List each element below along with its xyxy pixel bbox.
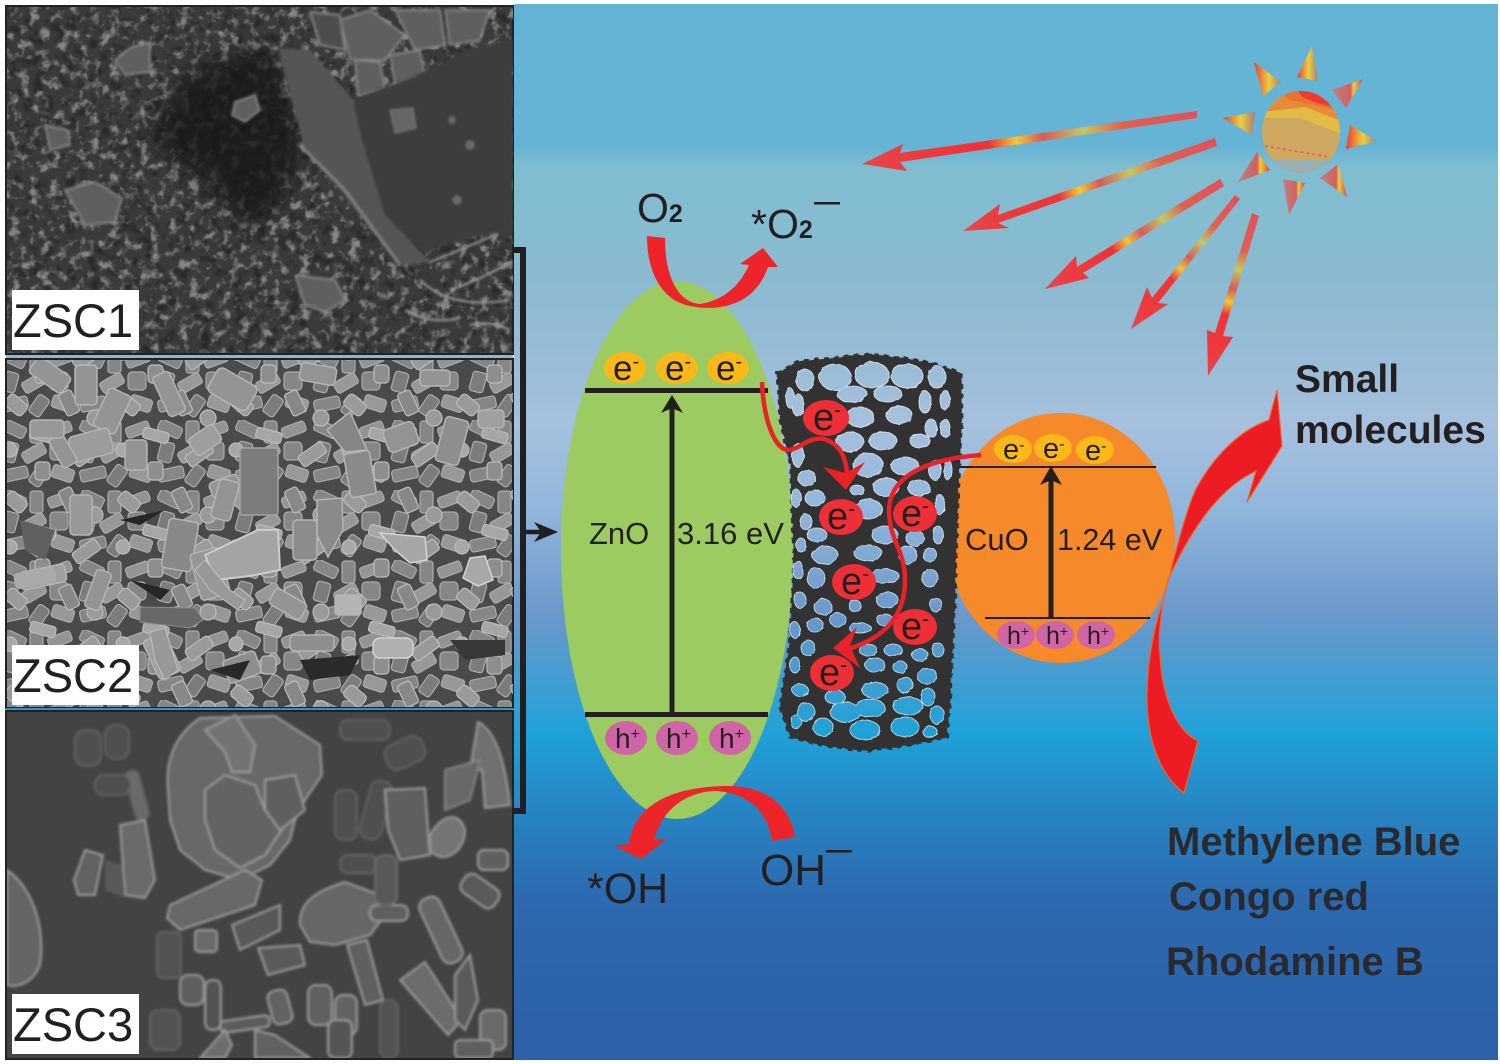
label: hydroxyl radical: *OH — [587, 865, 668, 913]
label: superoxide radical: *O2 — [751, 201, 813, 247]
ray 2 — [963, 138, 1217, 231]
CuO electrons: e — [1003, 434, 1019, 466]
sun body — [1260, 90, 1344, 174]
CuO electrons: e — [1085, 435, 1101, 467]
nanotube electrons: - — [848, 498, 855, 521]
ZnO valence band line — [585, 712, 768, 717]
ray 1 — [862, 111, 1197, 171]
nanotube electrons: - — [840, 654, 847, 677]
CuO electrons — [994, 433, 1114, 467]
ZnO electrons: e — [665, 349, 684, 388]
ZnO holes: + — [735, 726, 744, 743]
nanotube electrons: - — [834, 399, 841, 422]
ray 5 — [1207, 213, 1259, 376]
ZnO band gap arrow — [661, 395, 683, 713]
ZnO holes: h — [666, 723, 682, 754]
CuO band gap value: 1.24 eV — [1057, 523, 1163, 557]
label: superoxide radical — [751, 201, 840, 247]
nanotube electrons: - — [922, 495, 929, 518]
electron transfer arrow from ZnO to nanotube — [762, 382, 865, 490]
panel: SEM image ZSC3 — [6, 711, 513, 1059]
ZnO conduction band line — [585, 388, 768, 393]
nanotube electrons: e — [901, 606, 922, 648]
nanotube electrons: e — [813, 397, 834, 439]
ZnO electrons: e — [613, 349, 632, 388]
ZnO electrons — [604, 349, 749, 388]
label: small molecules: Small — [1295, 358, 1399, 401]
sun — [1223, 46, 1377, 215]
nanotube electrons: e — [901, 493, 922, 535]
sun spikes — [1223, 46, 1377, 215]
CuO holes: + — [1101, 623, 1109, 639]
CuO holes: h — [1087, 622, 1101, 650]
CuO holes: + — [1060, 623, 1068, 639]
ZnO electrons: - — [735, 351, 742, 373]
nanotube electrons: - — [862, 563, 869, 586]
CuO conduction band line — [958, 466, 1156, 468]
label: dye pollutants: Congo red — [1169, 875, 1369, 919]
ZnO holes: h — [719, 723, 735, 754]
panel: SEM image ZSC1 — [6, 6, 513, 354]
divider between SEM images — [6, 708, 513, 711]
carbon nanotube — [777, 354, 962, 751]
ray 3 — [1045, 179, 1224, 289]
CuO electrons: - — [1019, 437, 1024, 454]
label: ZSC2: ZSC2 — [13, 649, 133, 702]
label: hydroxide ion: OH — [760, 846, 826, 895]
hydroxyl oxidation curved arrow — [615, 786, 795, 859]
label: dye pollutants: Rhodamine B — [1166, 940, 1424, 984]
nanotube electrons: e — [827, 496, 848, 538]
CuO holes — [997, 621, 1115, 650]
sunlight rays — [862, 111, 1259, 376]
CuO holes: + — [1021, 623, 1029, 639]
ZnO label: ZnO — [589, 516, 649, 551]
label: dye pollutants — [1166, 820, 1460, 984]
CuO valence band line — [985, 617, 1150, 619]
label: O2: O2 — [637, 185, 683, 231]
ray 4 — [1131, 195, 1240, 329]
ZnO semiconductor ellipse — [561, 281, 793, 819]
CuO label: CuO — [965, 522, 1029, 557]
CuO holes: h — [1046, 622, 1060, 650]
ZnO electrons: e — [716, 349, 735, 388]
ZnO holes: h — [615, 723, 631, 754]
ZnO band gap value: 3.16 eV — [677, 516, 784, 551]
ZnO electrons: - — [632, 351, 639, 373]
panel: diagram background — [514, 4, 1498, 1060]
oxygen reduction curved arrow — [647, 236, 778, 308]
nanotube electrons: e — [819, 652, 840, 694]
CuO holes: h — [1007, 622, 1021, 650]
CuO electrons: - — [1101, 438, 1106, 455]
ZnO holes: + — [682, 726, 691, 743]
CuO electrons: - — [1059, 436, 1064, 453]
panel: SEM image ZSC2 — [6, 355, 513, 708]
label: ZSC1: ZSC1 — [13, 294, 133, 347]
bracket and arrow — [512, 250, 558, 811]
label: ZSC3: ZSC3 — [13, 998, 133, 1051]
label: small molecules — [1295, 358, 1486, 452]
label: dye pollutants: Methylene Blue — [1167, 820, 1460, 864]
nanotube electrons — [803, 397, 937, 694]
divider between SEM images — [6, 355, 513, 358]
nanotube electrons: - — [922, 608, 929, 631]
label: small molecules: molecules — [1295, 409, 1486, 452]
CuO semiconductor circle — [947, 413, 1175, 663]
nanotube electrons: e — [841, 561, 862, 603]
CuO electrons: e — [1043, 433, 1059, 465]
ZnO holes: + — [631, 726, 640, 743]
ZnO electrons: - — [684, 351, 691, 373]
ZnO holes — [605, 721, 751, 755]
electron transfer arrow from CuO across nanotube — [833, 455, 981, 668]
CuO band gap arrow — [1040, 466, 1062, 618]
dye degradation big arrow — [1147, 390, 1282, 793]
